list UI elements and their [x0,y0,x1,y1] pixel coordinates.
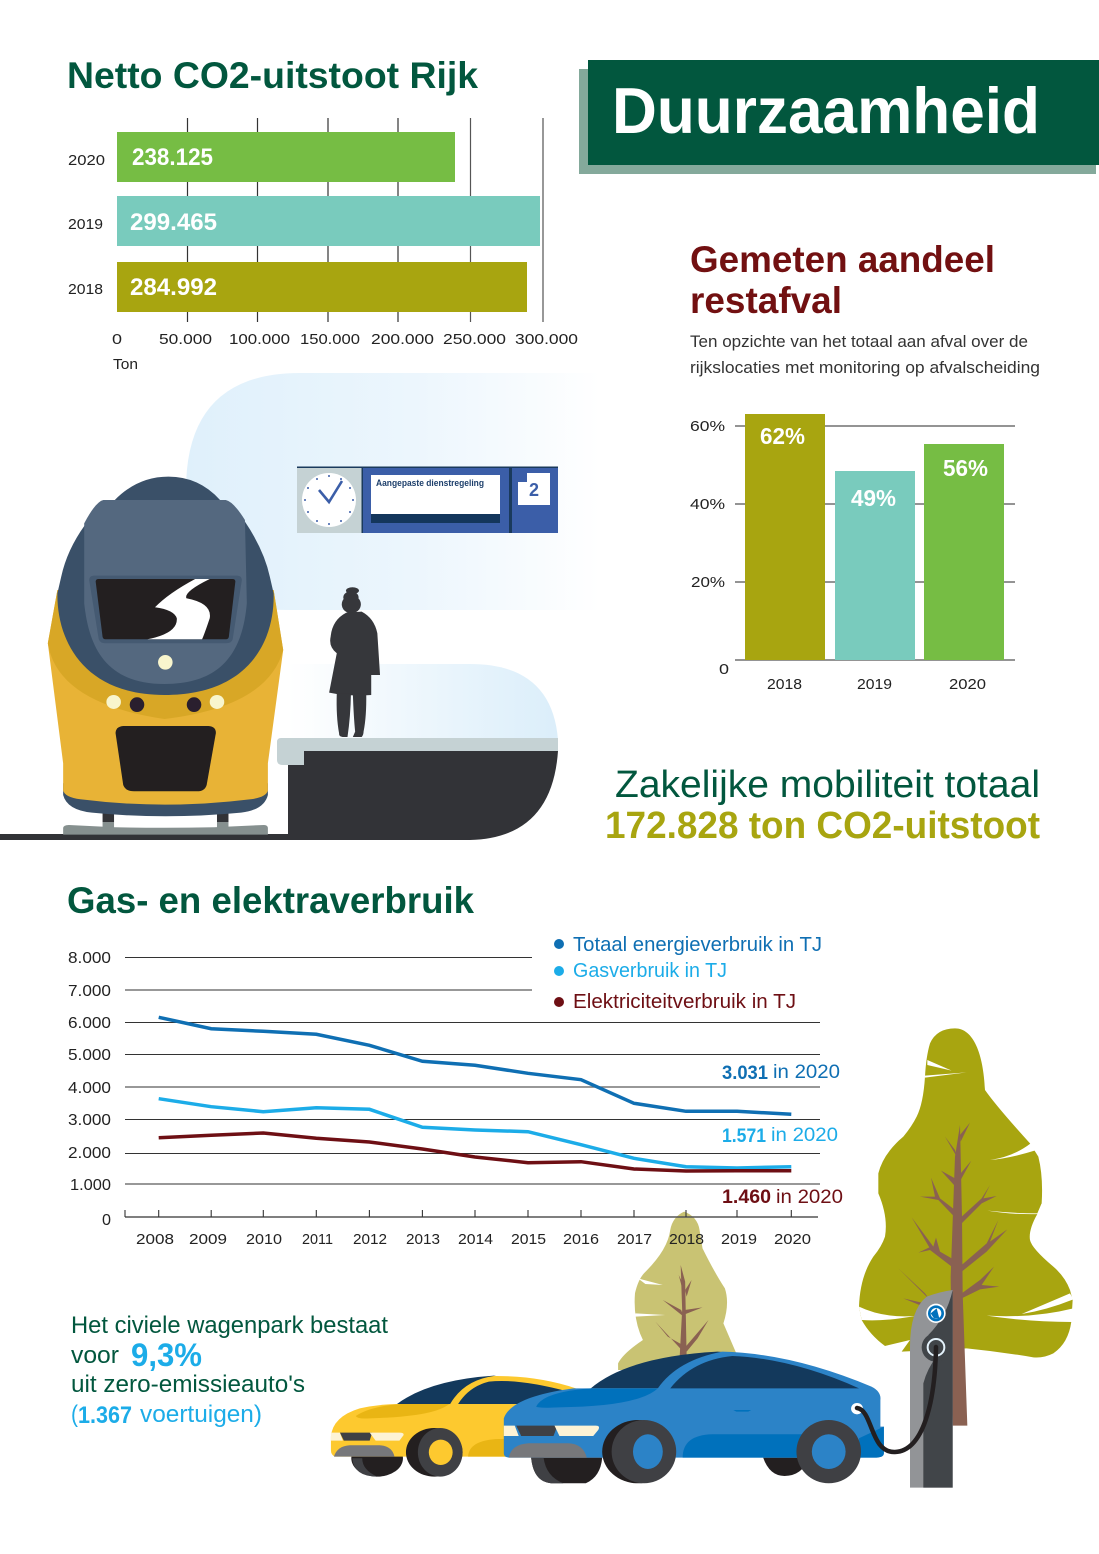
background shape upper [186,373,600,610]
x axis labels: 2015 [511,1231,546,1248]
illustration: train station [0,373,600,840]
x axis labels: 2016 [563,1231,599,1248]
column 2018: 62% [760,423,805,449]
charging cable [857,1347,936,1452]
column 2019: 49% [851,485,896,511]
column 2018 [745,414,825,660]
column 2020 [924,444,1004,660]
x axis labels: 2012 [353,1231,387,1248]
text: wagenpark: voor [71,1342,119,1369]
platform [0,738,558,840]
station sign [297,466,558,533]
x axis labels [136,1231,811,1248]
bar 2020 [117,132,455,182]
text: wagenpark: voertuigen) [140,1401,262,1428]
illustration: yellow car [331,1376,576,1477]
value axis labels: 300.000 [515,331,578,348]
y axis labels: 2.000 [68,1145,111,1162]
heading: Gemeten aandeel restafval [690,239,995,321]
line: elektriciteitverbruik [159,1133,791,1171]
label total 2020: in 2020 [773,1062,840,1083]
title banner: Duurzaamheid [612,74,1040,147]
icon: plug symbol [926,1304,946,1323]
text: wagenpark: 1.367 [78,1402,132,1429]
text: Zakelijke mobiliteit totaal [605,764,1040,847]
line: gasverbruik [159,1099,791,1168]
label gas 2020 [722,1125,838,1147]
subtitle restafval: Ten opzichte van het totaal aan afval over de [690,332,1028,351]
text: wagenpark: ( [71,1401,78,1428]
x axis labels: 2011 [302,1231,333,1248]
axis labels: 2019 [857,676,892,693]
text: Zakelijke mobiliteit totaal: 172.828 ton CO2-uitstoot [605,805,1040,847]
train front panel [84,500,247,684]
label electricity 2020 [722,1187,843,1208]
bar 2018 [117,262,527,312]
axis labels: 2020 [949,676,986,693]
label total 2020 [722,1062,840,1084]
x axis labels: 2019 [721,1231,757,1248]
text: wagenpark: 9,3% [131,1337,202,1373]
subtitle restafval: rijkslocaties met monitoring op afvalscheiding [690,358,1040,377]
column 2020: 56% [943,455,988,481]
label total 2020: 3.031 [722,1063,768,1084]
year labels [68,152,105,298]
axis labels: 20% [691,574,725,591]
train lamps [158,655,173,670]
train skirt [63,783,268,816]
legend [554,934,822,1013]
bar 2019 [117,196,540,246]
station sign: Aangepaste dienstregeling [376,478,484,488]
icon: charging socket [928,1339,944,1356]
heading: Gemeten aandeel restafval: restafval [690,280,842,321]
line chart: gas- en elektraverbruik [68,934,843,1248]
illustration: charging pole [910,1290,953,1488]
column chart: restafval [690,414,1015,693]
value axis labels: 0 [112,331,122,348]
y axis labels: 3.000 [68,1112,111,1129]
x axis labels: 2013 [406,1231,440,1248]
person silhouette [329,587,380,737]
axis labels: 0 [719,661,729,678]
year labels: 2020 [68,152,105,169]
illustration: pale tree [618,1212,737,1370]
text: wagenpark [71,1312,388,1429]
year labels: 2019 [68,216,103,233]
label gas 2020: in 2020 [771,1125,838,1146]
heading: Gemeten aandeel restafval: Gemeten aandeel [690,239,995,280]
x axis labels: 2010 [246,1231,282,1248]
y axis labels: 0 [102,1212,111,1229]
line: totaal energieverbruik [159,1017,791,1114]
legend: Gasverbruik in TJ [573,960,727,982]
x axis labels: 2008 [136,1231,174,1248]
background shape lower [288,664,558,740]
y axis labels: 8.000 [68,950,111,967]
value axis labels: 250.000 [443,331,506,348]
illustration: tall tree [859,1028,1073,1426]
value axis labels: 150.000 [300,331,360,348]
text: wagenpark: uit zero-emissieauto's [71,1371,305,1398]
value axis labels: 50.000 [159,331,212,348]
value axis labels [112,331,578,373]
station sign: 2 [529,480,539,500]
axis labels: 40% [690,496,725,513]
legend: Totaal energieverbruik in TJ [573,934,822,956]
bar 2018: 284.992 [130,274,217,301]
text: wagenpark: Het civiele wagenpark bestaat [71,1312,388,1339]
title banner [579,60,1099,174]
label gas 2020: 1.571 [722,1126,766,1147]
bar 2020: 238.125 [132,144,213,171]
y axis labels [68,950,111,1229]
axis labels [690,418,986,693]
x axis labels: 2014 [458,1231,493,1248]
train window [89,576,242,643]
label electricity 2020: in 2020 [776,1187,843,1208]
y axis labels: 7.000 [68,983,111,1000]
bar chart: netto CO2-uitstoot [68,118,578,373]
label electricity 2020: 1.460 [722,1187,771,1208]
value axis labels: 100.000 [229,331,290,348]
value axis labels: Ton [113,356,138,373]
illustration: blue car [504,1352,884,1483]
legend: Elektriciteitverbruik in TJ [573,991,796,1013]
bar 2019: 299.465 [130,209,217,236]
year labels: 2018 [68,281,103,298]
heading: Gas- en elektraverbruik: Gas- en elektraverbruik [67,880,474,921]
axis labels: 2018 [767,676,802,693]
text: Zakelijke mobiliteit totaal: Zakelijke mobiliteit totaal [615,764,1040,806]
x axis labels: 2018 [669,1231,704,1248]
train yellow body [48,590,283,805]
x axis labels: 2017 [617,1231,652,1248]
column 2019 [835,471,915,660]
y axis labels: 5.000 [68,1047,111,1064]
y axis labels: 1.000 [70,1177,111,1194]
heading: Netto CO2-uitstoot Rijk: Netto CO2-uitstoot Rijk [67,55,478,96]
train darker band [48,590,283,719]
train [48,477,283,835]
axis labels: 60% [690,418,725,435]
x axis labels: 2020 [774,1231,811,1248]
y axis labels: 4.000 [68,1080,111,1097]
subtitle restafval [690,332,1040,377]
train legs and rail [63,825,268,835]
y axis labels: 6.000 [68,1015,111,1032]
value axis labels: 200.000 [371,331,434,348]
x axis labels: 2009 [189,1231,227,1248]
train blue hood [57,477,274,695]
train lower panel [116,726,216,791]
